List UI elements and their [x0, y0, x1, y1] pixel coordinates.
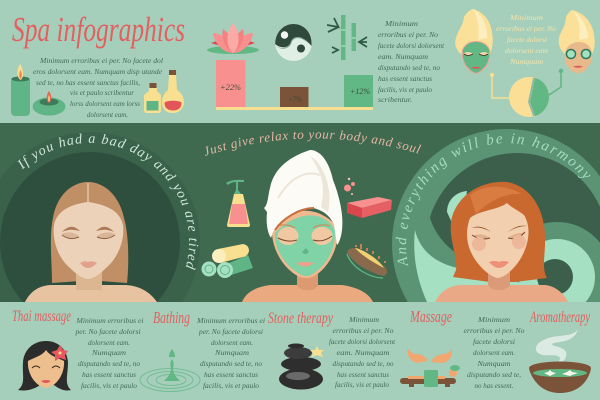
bar chart: [216, 60, 373, 110]
curved text: right circle: And everything will be in harmony: [396, 133, 590, 266]
text block: Thai massage: dolorsent eam.: [88, 339, 130, 347]
bar: +7%: [280, 87, 308, 107]
swirl behind right woman: [392, 129, 600, 302]
circle behind left woman: [0, 132, 198, 302]
text block: Massage: [464, 316, 525, 390]
intro text block: sed te, no has essent sanctus facilis,: [36, 79, 140, 87]
text block: Massage: facete dolorsi: [473, 338, 515, 346]
text block: Stone therapy: facete dolorsi dolorsent: [329, 338, 396, 346]
bar: +22%: [216, 60, 246, 107]
text block: Massage: Minimum: [477, 316, 510, 324]
title: Spa infographics: [12, 10, 185, 49]
heading: Bathing: Bathing: [153, 308, 190, 327]
text block: Stone therapy: [329, 316, 396, 389]
heading: Stone therapy: Stone therapy: [268, 310, 334, 327]
icon: soap: [344, 178, 392, 218]
text block: Bathing: Numquam: [214, 349, 249, 357]
intro text block: lorss dolorsent eam lorss: [70, 100, 140, 108]
text block: right of bamboo: erroribus ei per. No: [378, 31, 439, 39]
curved text: center: Just give relax to your body and soul: [205, 130, 422, 156]
text block: Thai massage: [74, 317, 144, 390]
text block: Stone therapy: has essent sanctus: [337, 371, 389, 379]
text block: Stone therapy: erroribus ei per. No: [332, 327, 394, 335]
icon: bamboo: [327, 15, 367, 60]
right woman with auburn hair: [435, 182, 568, 302]
text block: Thai massage: Numquam: [91, 349, 126, 357]
icon: yin yang: [275, 24, 312, 61]
icon: head with green mask: [455, 9, 493, 74]
text block: cream copy between heads: facete dolorsi: [507, 36, 547, 44]
text block: Thai massage: facilis, vis et paulo: [81, 382, 138, 390]
bar: +22%: +22%: [220, 83, 241, 92]
text block: cream copy between heads: erroribus ei per. No: [496, 25, 557, 33]
text block: right of bamboo: disputando sed te, no: [378, 64, 441, 72]
text block: Thai massage: disputando sed te, no: [78, 360, 141, 368]
intro text block: [33, 57, 163, 119]
bar: +12%: +12%: [350, 87, 370, 96]
text block: right of bamboo: facilis, vis et paulo: [378, 86, 433, 94]
left woman, eyes closed: [25, 182, 157, 302]
heading: Massage: Massage: [409, 307, 452, 326]
text block: Massage: dolorsent eam.: [473, 349, 515, 357]
icon: rolled towels: [202, 244, 253, 278]
intro text block: Minimum erroribus ei per. No facete dol: [39, 57, 163, 65]
icon: Thai woman with flower: [18, 341, 71, 391]
text block: right of bamboo: eam. Numquam: [378, 53, 428, 61]
icon: tall candle: [11, 64, 30, 116]
icon: stacked stones with flower: [279, 344, 324, 390]
text block: Bathing: disputando sed te, no: [200, 360, 263, 368]
text block: right of bamboo: scribentur.: [378, 96, 412, 104]
intro text block: eros dolorsent eam. Numquam disp utande: [33, 68, 162, 76]
text block: Massage: erroribus ei per. No: [464, 327, 525, 335]
text block: Thai massage: has essent sanctus: [82, 371, 136, 379]
heading: Thai massage: Thai massage: [12, 308, 71, 325]
text block: cream copy between heads: Numquam: [509, 58, 543, 66]
icon: brush: [347, 244, 387, 278]
icon: massage hands and table: [400, 347, 460, 387]
icon: aroma bowl with steam: [529, 329, 591, 393]
text block: Bathing: per. No facete dolorsi: [198, 328, 263, 336]
text block: Bathing: Minimum erroribus ei: [196, 317, 265, 325]
pie chart with connectors: [490, 69, 563, 117]
icon: water drop and ripples: [140, 349, 200, 392]
text block: right of bamboo: facete dolorsi dolorsent: [378, 42, 445, 50]
text block: Bathing: has essent sanctus: [204, 371, 258, 379]
text block: Stone therapy: Minimum: [348, 316, 379, 324]
text block: Bathing: dolorsent eam.: [211, 339, 253, 347]
icon: head with cucumbers: [559, 10, 595, 74]
curved text: left circle: If you had a bad day and you are tired: [18, 134, 198, 270]
text block: right of bamboo: has essent sanctus: [378, 75, 432, 83]
bar: +12%: [344, 75, 373, 107]
text block: cream copy between heads: dolorsent eam: [505, 47, 548, 55]
text block: cream copy between heads: [496, 14, 557, 66]
icon: pump bottle: [226, 180, 250, 227]
text block: Massage: Numquam: [476, 360, 510, 368]
text block: Stone therapy: eam. Numquam: [336, 349, 390, 357]
intro text block: dolorsent eam.: [87, 111, 128, 119]
text block: Bathing: facilis, vis et paulo: [203, 382, 260, 390]
center woman with towel and green mask: [242, 150, 373, 302]
text block: Bathing: [196, 317, 265, 390]
text block: Massage: no has essent.: [474, 382, 514, 390]
intro text block: vis et paulo scribentur: [70, 89, 134, 97]
text block: Thai massage: per. No facete dolorsi: [74, 328, 141, 336]
panel: dark green band: [0, 123, 600, 302]
icon: oil bottles: [144, 70, 184, 113]
text block: right of bamboo: Minimum: [384, 20, 418, 28]
text block: right of bamboo: [378, 20, 445, 104]
text block: Stone therapy: facilis, vis et paulo: [335, 381, 390, 389]
text block: Thai massage: Minimum erroribus ei: [75, 317, 144, 325]
icon: lotus: [207, 23, 259, 54]
icon: floating candle: [32, 91, 66, 116]
text block: Massage: disputando sed te,: [467, 371, 521, 379]
text block: cream copy between heads: Minimum: [509, 14, 543, 22]
bar: +7%: +7%: [288, 95, 302, 104]
text block: Stone therapy: disputando sed te, no: [332, 360, 394, 368]
